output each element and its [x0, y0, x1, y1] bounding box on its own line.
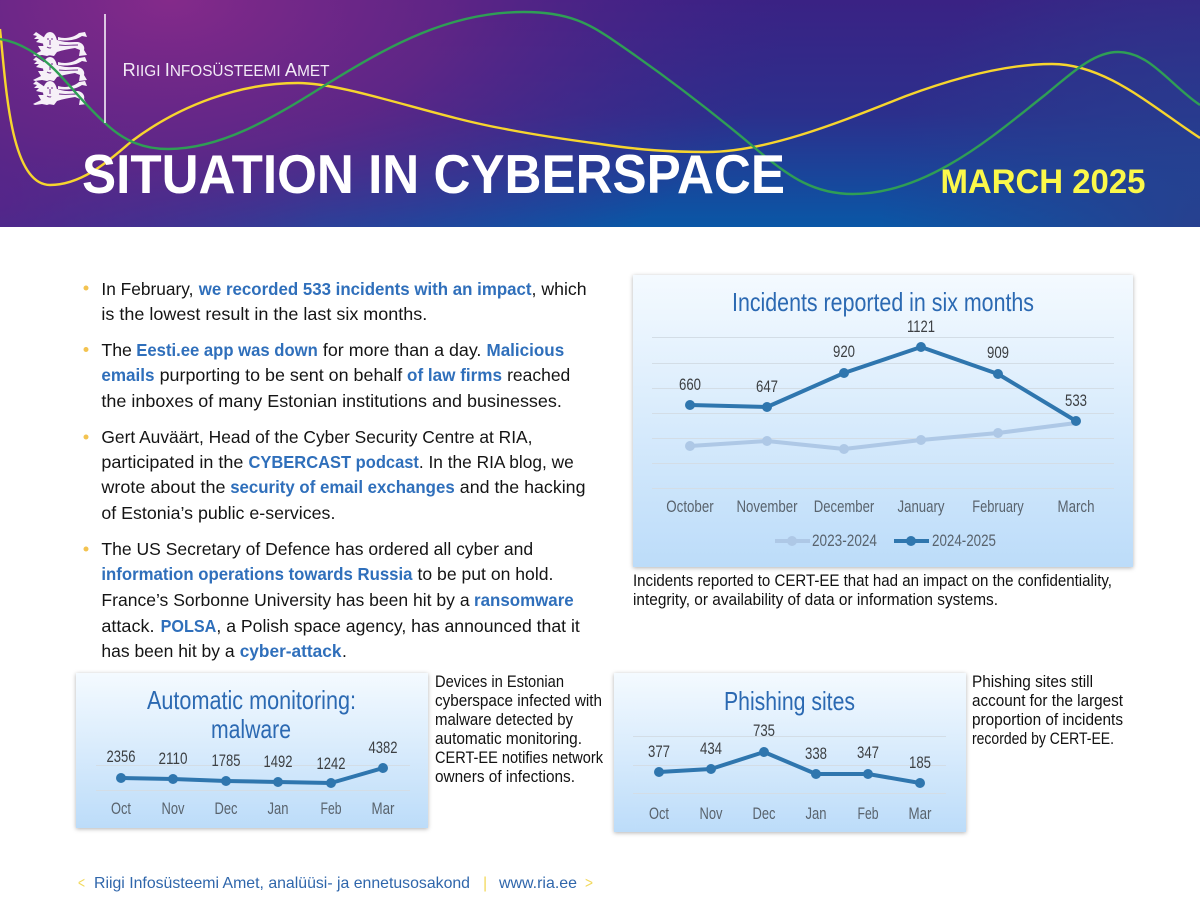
footer: www.ria.ee: [498, 875, 577, 892]
text block: key points: [84, 279, 587, 661]
data labels: 1492: [264, 753, 292, 771]
bullet 2: the inboxes of many Estonian institutions and businesses.: [101, 391, 562, 411]
footer: Riigi Infosüsteemi Amet, analüüsi- ja ennetusosakond: [94, 875, 470, 892]
title: SITUATION IN CYBERSPACE: [82, 143, 785, 205]
data labels: 185: [909, 754, 931, 772]
bullet 2: [84, 340, 570, 411]
data labels: 338: [805, 745, 827, 763]
bullet 4: France’s Sorbonne University has been hit by a: [101, 590, 470, 610]
chart title: Phishing sites: [724, 686, 855, 716]
bullet 3: wrote about the: [100, 477, 226, 497]
icon: three lions coat of arms: [33, 32, 87, 105]
green wave line: [0, 12, 1200, 194]
bullet 2: reached: [507, 365, 570, 385]
bullet 2: of law firms: [407, 365, 502, 385]
bullet 3: . In the RIA blog, we: [419, 452, 574, 472]
caption: malware chart: cyberspace infected with: [435, 691, 602, 710]
bullet 4: , a Polish space agency, has announced that it: [216, 616, 580, 636]
month axis: Feb: [320, 800, 342, 818]
data labels: 377: [648, 743, 670, 761]
caption: phishing chart: Phishing sites still: [972, 672, 1093, 691]
legend: 2024-2025: [932, 532, 996, 550]
bullet 2: The: [101, 340, 132, 360]
month axis: Dec: [214, 800, 238, 818]
bullet 3: Gert Auväärt, Head of the Cyber Security Centre at RIA,: [101, 427, 533, 447]
caption: malware chart: owners of infections.: [435, 767, 575, 786]
bullet 4: .: [342, 641, 347, 661]
caption: incidents chart: [633, 571, 1112, 609]
caption: malware chart: CERT-EE notifies network: [435, 748, 603, 767]
bullet 3: of Estonia’s public e-services.: [101, 503, 335, 523]
data labels: 920: [833, 343, 855, 361]
panel: malware chart: [76, 673, 428, 828]
data labels: 647: [756, 378, 778, 396]
month axis: Nov: [162, 800, 185, 818]
panel: incidents chart: [633, 275, 1133, 567]
caption: malware chart: Devices in Estonian: [435, 672, 564, 691]
month axis: Dec: [752, 805, 776, 823]
data labels: 347: [857, 744, 879, 762]
caption: phishing chart: account for the largest: [972, 691, 1123, 710]
bullet 4: [84, 539, 580, 661]
caption: malware chart: automatic monitoring.: [435, 729, 582, 748]
yellow wave line: [0, 29, 1200, 185]
data labels: 2356: [106, 748, 136, 766]
month axis: December: [814, 498, 875, 516]
bullet 4: information operations towards Russia: [101, 564, 413, 584]
month axis: March: [1058, 498, 1094, 516]
bullet 1: is the lowest result in the last six months.: [101, 304, 427, 324]
bullet 1: we recorded 533 incidents with an impact: [198, 279, 532, 299]
month axis: [666, 498, 1094, 516]
bullet 1: , which: [532, 279, 587, 299]
data labels: 533: [1065, 392, 1087, 410]
bullet 3: [84, 427, 586, 523]
month axis: [111, 800, 395, 818]
logo divider: [104, 14, 106, 123]
bullet 4: cyber-attack: [240, 641, 342, 661]
footer: |: [483, 875, 487, 892]
month axis: Jan: [268, 800, 288, 818]
month axis: January: [898, 498, 945, 516]
data labels: 1121: [907, 318, 935, 336]
data labels: [648, 722, 931, 772]
data labels: 909: [987, 344, 1009, 362]
footer: >: [585, 875, 593, 892]
bullet 2: for more than a day.: [323, 340, 481, 360]
bullet 4: has been hit by a: [101, 641, 235, 661]
data labels: 434: [700, 740, 722, 758]
bullet 3: security of email exchanges: [230, 477, 455, 497]
line series: [116, 763, 388, 788]
month axis: Jan: [806, 805, 826, 823]
bullet 1: In February,: [101, 279, 193, 299]
month axis: Oct: [111, 800, 131, 818]
data labels: 4382: [368, 739, 398, 757]
caption: incidents chart: Incidents reported to CERT-EE that had an impact on the confidentiality,: [633, 571, 1112, 590]
bullet 3: participated in the: [101, 452, 243, 472]
data labels: 2110: [158, 750, 188, 768]
bullet 1: [84, 279, 587, 324]
data labels: 660: [679, 376, 701, 394]
data labels: 1785: [212, 752, 240, 770]
month axis: Mar: [372, 800, 395, 818]
organisation name: RIIGI INFOSÜSTEEMI AMET: [122, 59, 330, 80]
chart title: Incidents reported in six months: [732, 287, 1034, 317]
bullet 2: purporting to be sent on behalf: [160, 365, 402, 385]
bullet 4: to be put on hold.: [418, 564, 553, 584]
bullet 2: emails: [101, 365, 155, 385]
month axis: November: [736, 498, 798, 516]
panel: phishing chart: [614, 673, 966, 832]
footer: <: [78, 875, 85, 892]
caption: malware chart: [435, 672, 603, 786]
data labels: [106, 739, 398, 773]
month axis: Mar: [908, 805, 932, 823]
month axis: Feb: [858, 805, 878, 823]
bullet 4: ransomware: [474, 590, 574, 610]
legend: 2023-2024: [812, 532, 877, 550]
bullet 3: CYBERCAST podcast: [248, 452, 419, 472]
caption: phishing chart: [972, 672, 1123, 748]
bullet 4: attack.: [101, 616, 154, 636]
chart title: Automatic monitoring:: [147, 685, 356, 715]
month axis: [649, 805, 932, 823]
series 2023-2024: [685, 423, 1076, 454]
month axis: Nov: [700, 805, 723, 823]
month axis: February: [972, 498, 1024, 516]
bullet 4: POLSA: [161, 616, 217, 636]
data labels: 1242: [316, 755, 346, 773]
bullet 2: Malicious: [486, 340, 564, 360]
line series: [654, 747, 925, 788]
date: MARCH 2025: [940, 163, 1146, 201]
bullet 3: and the hacking: [460, 477, 586, 497]
header banner: [0, 0, 1200, 227]
data labels: [679, 318, 1087, 410]
data labels: 735: [753, 722, 775, 740]
series 2024-2025: [685, 342, 1081, 426]
month axis: Oct: [649, 805, 669, 823]
bullet 4: The US Secretary of Defence has ordered all cyber and: [101, 539, 533, 559]
legend: [775, 532, 996, 550]
chart title: [147, 685, 356, 744]
caption: phishing chart: recorded by CERT-EE.: [972, 729, 1114, 748]
caption: incidents chart: integrity, or availability of data or information systems.: [633, 590, 998, 609]
chart title: malware: [211, 714, 291, 744]
caption: phishing chart: proportion of incidents: [972, 710, 1123, 729]
caption: malware chart: malware detected by: [435, 710, 573, 729]
bullet 2: Eesti.ee app was down: [136, 340, 318, 360]
month axis: October: [666, 498, 714, 516]
